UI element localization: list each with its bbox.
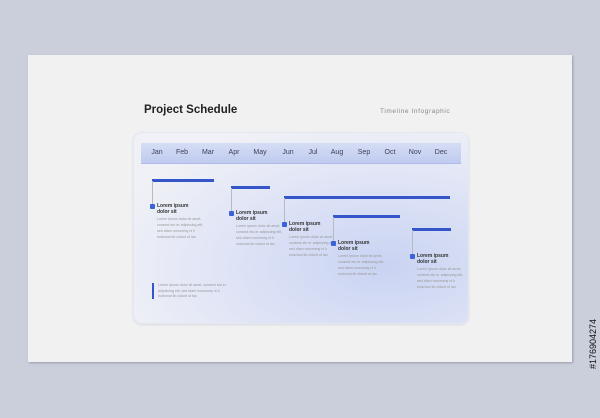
task 3: Lorem ipsum bbox=[289, 221, 320, 227]
task 2: Lorem ipsum dolor sit amet, consect etu er adipiscing elit, sed diam nonummy ni h euismod tin cidunt ut lao bbox=[236, 224, 282, 246]
task 5: Lorem ipsum bbox=[417, 253, 448, 259]
task 2: dolor sit bbox=[236, 216, 256, 222]
month labels: Dec bbox=[435, 149, 447, 156]
month labels: May bbox=[253, 149, 267, 156]
title: Project Schedule bbox=[144, 104, 237, 116]
month labels: Mar bbox=[202, 149, 214, 156]
month labels: Sep bbox=[358, 149, 370, 156]
task 2 bbox=[229, 186, 282, 246]
month labels: Jun bbox=[282, 149, 294, 156]
task 3: dolor sit bbox=[289, 227, 309, 233]
task 1: Lorem ipsum bbox=[157, 203, 188, 209]
slide bbox=[28, 55, 572, 362]
month labels: Nov bbox=[409, 149, 421, 156]
task 3: Lorem ipsum dolor sit amet, consect etu er adipiscing elit, sed diam nonummy ni h euismod tin cidunt ut lao bbox=[289, 235, 335, 257]
task 3 bbox=[282, 196, 450, 257]
panel: timeline bbox=[133, 132, 469, 324]
task 5 bbox=[410, 228, 463, 289]
task 5: Lorem ipsum dolor sit amet, consect etu er adipiscing elit, sed diam nonummy ni h euismod tin cidunt ut lao bbox=[417, 267, 463, 289]
month labels: Oct bbox=[385, 149, 395, 156]
task 4: Lorem ipsum bbox=[338, 240, 369, 246]
month labels: Jan bbox=[151, 149, 163, 156]
month labels: Feb bbox=[176, 149, 188, 156]
task 4: Lorem ipsum dolor sit amet, consect etu er adipiscing elit, sed diam nonummy ni h euismod tin cidunt ut lao bbox=[338, 254, 384, 276]
stock id: #176904274 bbox=[588, 319, 598, 369]
task 5: dolor sit bbox=[417, 259, 437, 265]
task 4 bbox=[331, 215, 400, 276]
month labels: Jul bbox=[309, 149, 317, 156]
task 1: Lorem ipsum dolor sit amet, consect etu er adipiscing elit, sed diam nonummy ni h euismod tin cidunt ut lao bbox=[157, 217, 203, 239]
task 1: dolor sit bbox=[157, 209, 177, 215]
subtitle: Timeline Infographic bbox=[380, 108, 450, 115]
month header bbox=[141, 143, 461, 164]
task 2: Lorem ipsum bbox=[236, 210, 267, 216]
month labels: Apr bbox=[229, 149, 239, 156]
task 1 bbox=[150, 179, 214, 239]
month labels: Aug bbox=[331, 149, 343, 156]
note: Lorem ipsum dolor sit amet, consect etu er adipiscing elit, sed diam nonummy ni h euismod tin cidunt ut lao bbox=[158, 283, 226, 298]
task 4: dolor sit bbox=[338, 246, 358, 252]
